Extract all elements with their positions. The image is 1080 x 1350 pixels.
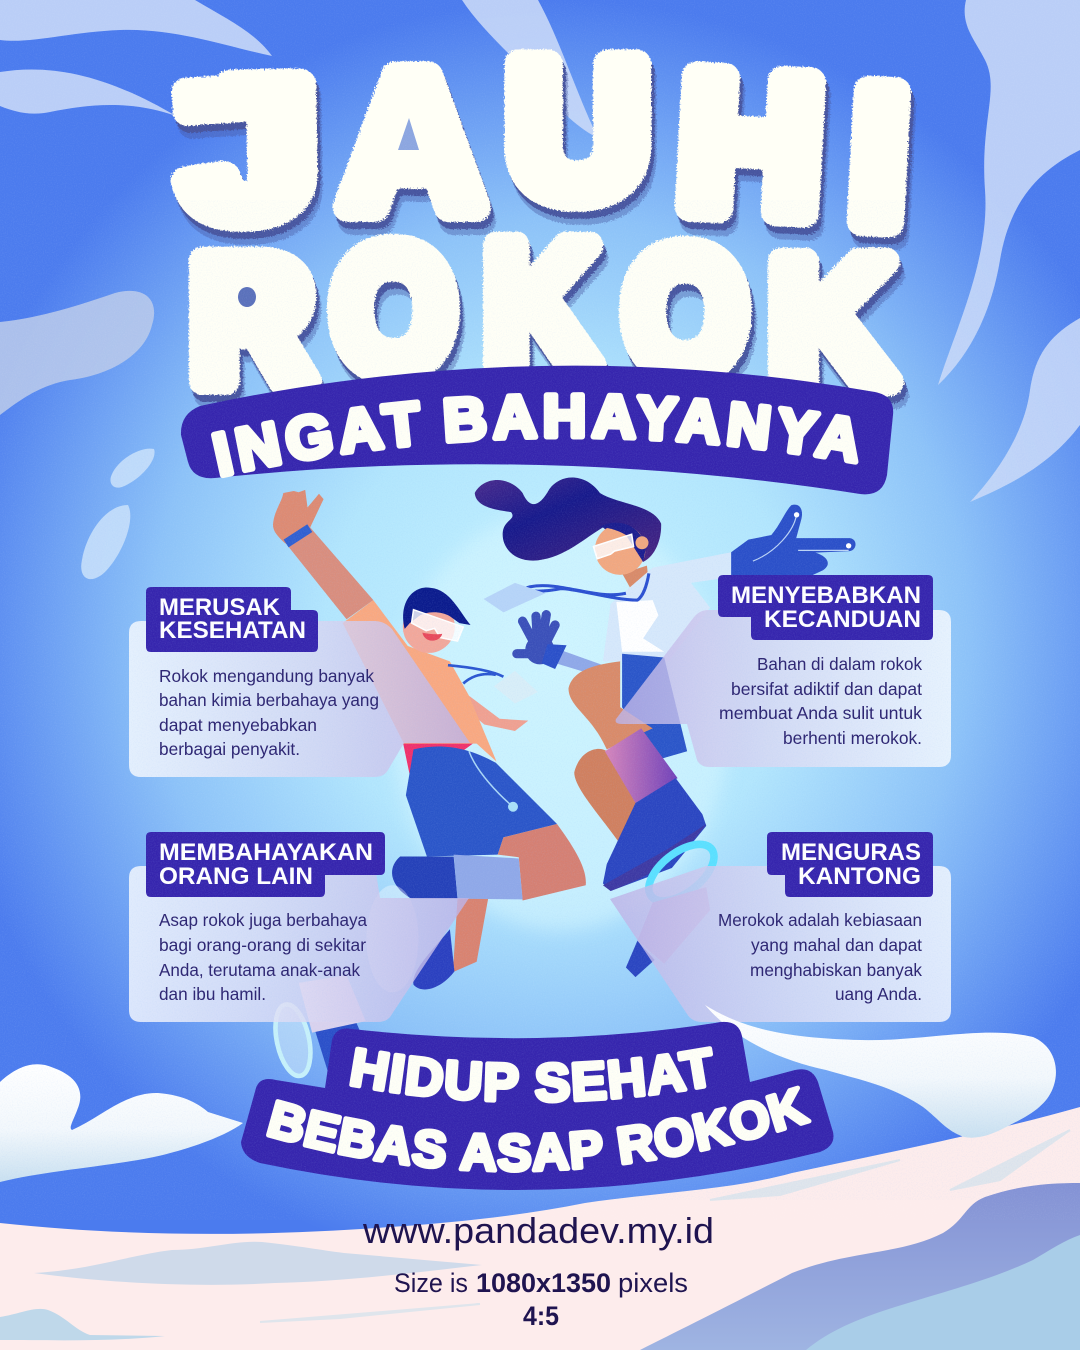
label: menguras kantong (767, 832, 933, 897)
text: membahayakan orang lain (159, 910, 367, 1004)
label: menyebabkan kecanduan: MENYEBABKAN (731, 582, 921, 609)
text: menyebabkan kecanduan (719, 654, 922, 748)
text: merusak kesehatan: bahan kimia berbahaya yang (159, 690, 379, 710)
banner: ingat bahayanya: INGAT BAHAYANYA (210, 392, 858, 478)
text: merusak kesehatan: berbagai penyakit. (159, 739, 300, 759)
heading: JAUHI ROKOK: K (485, 209, 596, 404)
heading: JAUHI ROKOK: H (675, 35, 826, 254)
footer: ratio: 4:5 (523, 1301, 559, 1331)
panel: merusak kesehatan background (129, 621, 470, 777)
heading: JAUHI ROKOK: K (770, 225, 892, 420)
right cloud (705, 1005, 1056, 1138)
text: menyebabkan kecanduan: berhenti merokok. (783, 728, 922, 748)
text: membahayakan orang lain: bagi orang-orang di sekitar (159, 935, 366, 955)
heading: JAUHI ROKOK (170, 24, 911, 420)
heading: JAUHI ROKOK: J (183, 43, 317, 257)
text: menguras kantong: yang mahal dan dapat (751, 935, 922, 955)
heading: small counters in A and R (238, 118, 419, 307)
illustration: two jumping characters (270, 478, 856, 1079)
heading: JAUHI ROKOK: I (847, 50, 911, 264)
heading: JAUHI ROKOK: O (625, 215, 746, 410)
label: membahayakan orang lain (146, 832, 385, 897)
banner: hidup sehat bebas asap rokok: HIDUP SEHAT (349, 1046, 713, 1104)
panel: membahayakan orang lain background (129, 866, 469, 1022)
text: menyebabkan kecanduan: bersifat adiktif dan dapat (731, 679, 922, 699)
label: merusak kesehatan: MERUSAK (159, 594, 280, 621)
footer: size note: pixels (618, 1268, 688, 1298)
left cloud (0, 1064, 243, 1182)
footer: website url: www.pandadev.my.id (362, 1210, 714, 1251)
smoke clouds (0, 0, 1080, 579)
banner: hidup sehat bebas asap rokok (241, 1022, 834, 1190)
text: menguras kantong: uang Anda. (835, 984, 922, 1004)
label: merusak kesehatan: KESEHATAN (159, 617, 306, 644)
footer: size note: Size is (394, 1268, 468, 1298)
panel: menguras kantong background (610, 866, 951, 1022)
text: menyebabkan kecanduan: membuat Anda sulit untuk (719, 703, 922, 723)
label: menguras kantong: MENGURAS (781, 839, 921, 866)
text: menyebabkan kecanduan: Bahan di dalam rokok (757, 654, 922, 674)
text: menguras kantong (718, 910, 922, 1004)
text: menguras kantong: menghabiskan banyak (750, 960, 922, 980)
label: menguras kantong: KANTONG (798, 863, 921, 890)
footer: size note: 1080x1350 (476, 1268, 611, 1298)
girl: character (475, 478, 856, 977)
heading: JAUHI ROKOK: A (343, 36, 481, 248)
ground with pink hills (0, 1107, 1080, 1350)
glow behind characters (390, 510, 730, 930)
panel: menyebabkan kecanduan background (616, 610, 951, 767)
boy: character (270, 490, 586, 1079)
text: merusak kesehatan: dapat menyebabkan (159, 715, 317, 735)
label: merusak kesehatan (146, 587, 318, 652)
label: membahayakan orang lain: ORANG LAIN (159, 863, 313, 890)
heading: JAUHI ROKOK: U (508, 24, 648, 236)
heading: JAUHI ROKOK: R (191, 224, 312, 419)
label: menyebabkan kecanduan: KECANDUAN (764, 606, 921, 633)
text: merusak kesehatan (159, 666, 379, 759)
label: membahayakan orang lain: MEMBAHAYAKAN (159, 839, 373, 866)
text: membahayakan orang lain: Asap rokok juga berbahaya (159, 910, 367, 930)
heading: JAUHI ROKOK: O (333, 213, 454, 408)
text: membahayakan orang lain: Anda, terutama anak-anak (159, 960, 360, 980)
text: menguras kantong: Merokok adalah kebiasaan (718, 910, 922, 930)
text: membahayakan orang lain: dan ibu hamil. (159, 984, 266, 1004)
banner: hidup sehat bebas asap rokok: BEBAS ASAP ROKOK (266, 1086, 812, 1173)
text: merusak kesehatan: Rokok mengandung banyak (159, 666, 374, 686)
label: menyebabkan kecanduan (718, 575, 933, 640)
